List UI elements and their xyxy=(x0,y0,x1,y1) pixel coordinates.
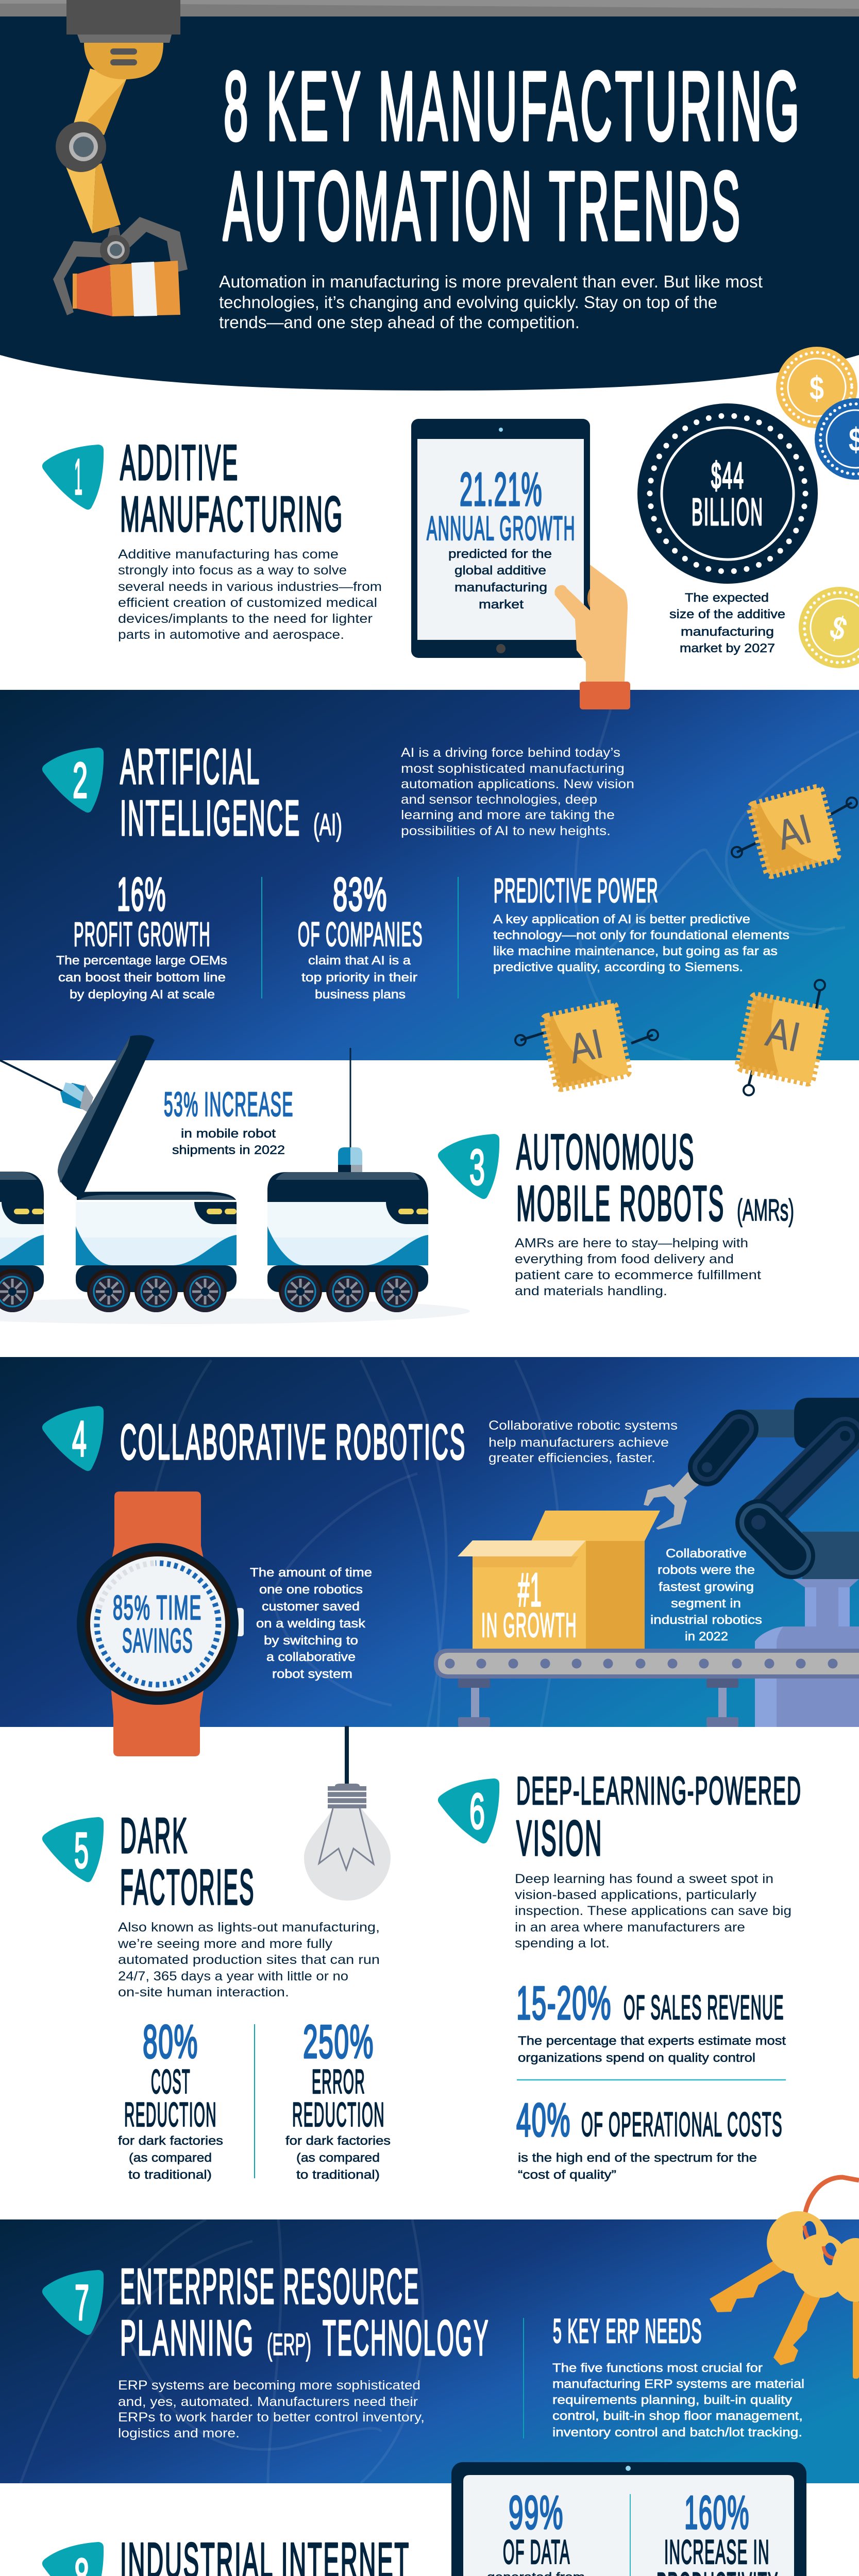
conveyor caption: fastest growing xyxy=(659,1580,754,1594)
badge 7: 7 xyxy=(75,2275,89,2331)
body text: devices/implants to the need for lighter xyxy=(118,612,373,626)
icon: light bulb xyxy=(304,1726,391,1901)
stat: 21.21% annual growth: manufacturing xyxy=(454,581,547,595)
watch caption: a collaborative xyxy=(266,1650,356,1664)
stat: 15-20% of sales revenue xyxy=(516,1977,786,2065)
stat: $44 billion: manufacturing xyxy=(681,625,774,639)
body text: Also known as lights-out manufacturing, xyxy=(118,1920,380,1935)
stat: 16% profit growth: by deploying AI at scale xyxy=(70,988,215,1002)
conveyor caption: robots were the xyxy=(658,1563,755,1577)
panel: 2 artificial intelligence: OF COMPANIES xyxy=(298,915,423,953)
intro text: and sensor technologies, deep xyxy=(401,792,597,807)
icon: box on conveyor: IN GROWTH xyxy=(481,1606,577,1644)
body text: Deep learning has found a sweet spot in xyxy=(515,1872,773,1886)
stat: 40% of operational costs: 40% xyxy=(516,2094,571,2146)
panel: 4 collaborative robotics: COLLABORATIVE ROBOTICS xyxy=(120,1415,466,1470)
body text: several needs in various industries—from xyxy=(118,580,382,594)
badge 2 xyxy=(42,748,104,812)
stat: 15-20% of sales revenue: organizations spend on quality control xyxy=(518,2051,755,2065)
stat: 80% cost reduction: (as compared xyxy=(129,2151,212,2165)
tablet with hand: ANNUAL GROWTH xyxy=(427,509,576,547)
body text: spending a lot. xyxy=(515,1936,610,1951)
badge 8 xyxy=(42,2542,104,2576)
badge 1 xyxy=(42,445,104,510)
heading: INTELLIGENCE xyxy=(120,791,301,846)
intro text: trends—and one step ahead of the competition. xyxy=(219,313,580,332)
stat: $44 billion xyxy=(637,403,818,655)
stat: 85% time savings: 85% TIME xyxy=(113,1588,202,1626)
predictive power: PREDICTIVE POWER xyxy=(494,871,659,909)
panel: 5 dark factories: REDUCTION xyxy=(124,2095,217,2133)
predictive power: predictive quality, according to Siemens. xyxy=(493,960,743,974)
robot left xyxy=(0,1172,44,1312)
body text: in an area where manufacturers are xyxy=(515,1920,745,1935)
stat: 160% increase in productivity xyxy=(656,2487,779,2576)
icon: AI chip bottom middle: AI xyxy=(565,1020,607,1072)
main arm xyxy=(759,1436,845,1521)
stat: 80% cost reduction: for dark factories xyxy=(118,2134,223,2148)
conveyor caption: industrial robotics xyxy=(650,1613,762,1627)
body text: automated production sites that can run xyxy=(118,1953,380,1967)
heading xyxy=(120,435,344,542)
stat: 160% increase in productivity: 160% xyxy=(684,2487,750,2539)
icon: robot arm holding box xyxy=(53,0,188,316)
stat: 83% of companies: claim that AI is a xyxy=(308,954,411,968)
robot right with beacon xyxy=(267,1048,428,1312)
body text xyxy=(117,1920,380,1999)
panel: 7 erp technology xyxy=(42,2177,859,2441)
watch caption: customer saved xyxy=(262,1600,360,1614)
stat: 80% cost reduction: COST xyxy=(151,2062,191,2100)
predictive power xyxy=(493,871,789,974)
intro text: help manufacturers achieve xyxy=(489,1435,669,1450)
robot middle with open lid xyxy=(0,1035,237,1312)
heading: ADDITIVE xyxy=(120,435,239,490)
panel: 5 dark factories: FACTORIES xyxy=(120,1860,255,1915)
stat: 83% of companies: 83% xyxy=(333,869,388,921)
stat: 80% cost reduction xyxy=(118,2016,223,2182)
intro text xyxy=(219,272,763,332)
watch caption: on a welding task xyxy=(256,1617,366,1631)
intro text xyxy=(401,745,634,838)
badge 4 xyxy=(42,1406,104,1471)
predictive power: like machine maintenance, but going as far as xyxy=(493,944,778,958)
5 key ERP needs: control, built-in shop floor management, xyxy=(552,2409,803,2423)
icon: box on conveyor xyxy=(458,1511,660,1649)
badge 5: 5 xyxy=(74,1822,89,1878)
badge 2: 2 xyxy=(73,752,88,808)
heading: (AI) xyxy=(313,808,342,842)
conveyor caption xyxy=(650,1547,762,1643)
heading: (AMRs) xyxy=(737,1193,794,1227)
robots illustration xyxy=(0,1035,470,1324)
conveyor caption: segment in xyxy=(671,1597,741,1611)
body text: and materials handling. xyxy=(515,1284,667,1298)
panel: 5 dark factories xyxy=(42,1726,391,2182)
body text: efficient creation of customized medical xyxy=(118,596,377,610)
stat: 40% of operational costs xyxy=(516,2094,783,2182)
conveyor caption: Collaborative xyxy=(666,1547,747,1561)
stat: $44 billion: The expected xyxy=(685,591,769,605)
stat: 21.21% annual growth: market xyxy=(479,598,524,612)
stat: 16% profit growth xyxy=(56,869,227,1002)
intro text: possibilities of AI to new heights. xyxy=(401,824,611,838)
intro text: AI is a driving force behind today’s xyxy=(401,745,620,760)
icon: coins: $ xyxy=(826,608,852,648)
heading: PLANNING xyxy=(120,2311,255,2366)
heading xyxy=(516,1769,802,1866)
stat: 15-20% of sales revenue: 15-20% xyxy=(516,1977,612,2029)
body text: parts in automotive and aerospace. xyxy=(118,628,344,642)
badge 3: 3 xyxy=(469,1139,485,1195)
stat: 53% increase: in mobile robot xyxy=(181,1127,276,1141)
panel: 2 artificial intelligence: PROFIT GROWTH xyxy=(74,915,211,953)
5 key ERP needs: The five functions most crucial for xyxy=(552,2361,763,2375)
icon: hand xyxy=(554,565,630,709)
lower joint xyxy=(759,1522,792,1556)
monitor xyxy=(451,2462,806,2576)
heading: (ERP) xyxy=(267,2328,311,2362)
5 key ERP needs xyxy=(552,2312,804,2439)
icon: watch xyxy=(77,1492,244,1756)
panel: 6 deep-learning-powered vision xyxy=(438,1769,802,2182)
stat: 83% of companies: top priority in their xyxy=(301,971,417,985)
heading: DARK xyxy=(120,1808,189,1863)
stat: 99% of data: OF DATA xyxy=(503,2533,570,2571)
stat: 250% error reduction: for dark factories xyxy=(285,2134,391,2148)
stat: 15-20% of sales revenue: The percentage that experts estimate most xyxy=(518,2034,786,2048)
stat: 21.21% annual growth xyxy=(427,464,576,612)
stat: 250% error reduction: (as compared xyxy=(296,2151,380,2165)
heading xyxy=(120,1808,255,1915)
heading: ENTERPRISE RESOURCE xyxy=(120,2259,420,2314)
stat: 16% profit growth: 16% xyxy=(117,869,166,921)
icon: AI chip top right xyxy=(732,787,857,876)
body text: ERP systems are becoming more sophisticated xyxy=(118,2378,420,2393)
panel: 2 artificial intelligence xyxy=(42,739,857,1095)
badge 7 xyxy=(42,2270,104,2335)
badge 3 xyxy=(438,1134,499,1199)
body text: 24/7, 365 days a year with little or no xyxy=(118,1969,348,1984)
heading xyxy=(516,1125,794,1231)
5 key ERP needs: requirements planning, built-in quality xyxy=(552,2393,792,2407)
gripper xyxy=(644,1472,699,1530)
conveyor belt xyxy=(434,1649,859,1727)
title xyxy=(223,52,802,261)
panel: 1 additive manufacturing: MANUFACTURING xyxy=(120,487,344,542)
intro text: automation applications. New vision xyxy=(401,777,634,791)
conveyor caption: in 2022 xyxy=(685,1630,728,1643)
stat: 80% cost reduction: 80% xyxy=(143,2016,198,2068)
stat: 16% profit growth: can boost their bottom line xyxy=(58,971,226,985)
stat: $44 billion: BILLION xyxy=(692,490,764,533)
stat: 250% error reduction: ERROR xyxy=(312,2062,365,2100)
heading xyxy=(120,739,342,846)
stat: 21.21% annual growth: predicted for the xyxy=(448,547,552,561)
body text: strongly into focus as a way to solve xyxy=(118,563,347,578)
predictive power: A key application of AI is better predictive xyxy=(493,912,750,926)
stat: $44 billion: size of the additive xyxy=(669,607,785,621)
body text: inspection. These applications can save big xyxy=(515,1904,791,1918)
intro text: learning and more are taking the xyxy=(401,808,615,822)
heading: VISION xyxy=(516,1811,603,1866)
intro text: greater efficiencies, faster. xyxy=(489,1451,655,1465)
stat: 21.21% annual growth: 21.21% xyxy=(460,464,543,516)
icon: AI chip bottom middle xyxy=(515,1003,658,1089)
stat: 40% of operational costs: is the high end of the spectrum for the xyxy=(518,2151,757,2165)
watch caption: one one robotics xyxy=(259,1583,363,1597)
stat: 21.21% annual growth: global additive xyxy=(454,564,546,578)
icon: box on conveyor: #1 xyxy=(518,1564,542,1616)
body text: ERPs to work harder to better control inventory, xyxy=(118,2410,425,2425)
body text: AMRs are here to stay—helping with xyxy=(515,1236,748,1250)
stat: 85% time savings xyxy=(113,1588,202,1659)
intro text xyxy=(489,1418,678,1465)
stat: $44 billion: market by 2027 xyxy=(680,641,775,655)
body text: Additive manufacturing has come xyxy=(118,547,339,562)
stat: 83% of companies: business plans xyxy=(315,988,406,1002)
body text: and, yes, automated. Manufacturers need their xyxy=(118,2395,418,2409)
icon: coins: $ xyxy=(810,369,824,406)
stat: 53% increase: shipments in 2022 xyxy=(172,1143,285,1157)
icon: coins xyxy=(776,347,859,668)
panel: header xyxy=(0,0,859,391)
stat: 83% of companies xyxy=(298,869,423,1002)
watch caption xyxy=(250,1566,372,1681)
ceiling rail xyxy=(0,0,859,16)
icon: AI chip bottom right xyxy=(738,980,826,1095)
intro text: Collaborative robotic systems xyxy=(489,1418,678,1433)
stat: 99% of data: 99% xyxy=(509,2487,564,2539)
stat: 80% cost reduction: to traditional) xyxy=(128,2168,212,2182)
watch caption: The amount of time xyxy=(250,1566,372,1580)
badge 6: 6 xyxy=(469,1783,485,1839)
stat: $44 billion: $44 xyxy=(711,455,745,497)
stat: 99% of data xyxy=(478,2487,594,2576)
badge 1: 1 xyxy=(74,449,82,505)
panel: 8 industrial internet of things xyxy=(42,2462,806,2576)
icon: keys xyxy=(710,2177,859,2379)
5 key ERP needs: inventory control and batch/lot tracking. xyxy=(552,2426,802,2439)
body text: we’re seeing more and more fully xyxy=(117,1937,333,1951)
illustration: robot arm on base xyxy=(644,1398,859,1727)
watch caption: by switching to xyxy=(264,1634,358,1648)
heading xyxy=(120,2259,490,2366)
upper joint xyxy=(707,1429,739,1467)
icon: AI chip bottom right: AI xyxy=(762,1009,804,1060)
intro text: most sophisticated manufacturing xyxy=(401,761,625,776)
stat: 16% profit growth: The percentage large OEMs xyxy=(56,954,227,968)
body text xyxy=(515,1236,761,1298)
predictive power: technology—not only for foundational elements xyxy=(493,928,789,942)
body text: patient care to ecommerce fulfillment xyxy=(515,1268,761,1282)
text: REDUCTION xyxy=(292,2095,385,2133)
body text: on-site human interaction. xyxy=(118,1985,289,1999)
stat: 250% error reduction: to traditional) xyxy=(296,2168,380,2182)
body text: logistics and more. xyxy=(118,2426,240,2441)
body text xyxy=(118,547,382,642)
badge 5 xyxy=(42,1817,104,1882)
body text: vision-based applications, particularly xyxy=(515,1888,757,1902)
panel: 3 autonomous mobile robots xyxy=(0,1035,794,1324)
intro text: technologies, it’s changing and evolving quickly. Stay on top of the xyxy=(219,293,717,312)
body text: everything from food delivery and xyxy=(515,1252,734,1266)
panel: 1 additive manufacturing xyxy=(42,347,859,709)
icon: AI chip top right: AI xyxy=(772,805,816,858)
panel: 7 erp technology: TECHNOLOGY xyxy=(323,2311,490,2366)
body text xyxy=(118,2378,425,2441)
heading: ARTIFICIAL xyxy=(120,739,261,794)
panel: 4 collaborative robotics xyxy=(42,1398,859,1756)
stat: 250% error reduction xyxy=(285,2016,391,2182)
stat: 40% of operational costs: “cost of quality” xyxy=(518,2168,616,2182)
badge 4: 4 xyxy=(72,1411,87,1467)
watch caption: robot system xyxy=(272,1667,352,1681)
tablet with hand xyxy=(411,419,630,709)
5 key ERP needs: manufacturing ERP systems are material xyxy=(552,2377,804,2391)
panel: 3 autonomous mobile robots: 53% INCREASE xyxy=(164,1085,294,1123)
intro text: Automation in manufacturing is more prevalent than ever. But like most xyxy=(219,272,763,291)
badge 6 xyxy=(438,1778,499,1843)
icon: watch: SAVINGS xyxy=(122,1621,193,1659)
body text xyxy=(515,1872,791,1951)
stat: 250% error reduction: 250% xyxy=(303,2016,374,2068)
stat: 53% increase xyxy=(164,1085,294,1157)
header navy background xyxy=(0,16,859,391)
